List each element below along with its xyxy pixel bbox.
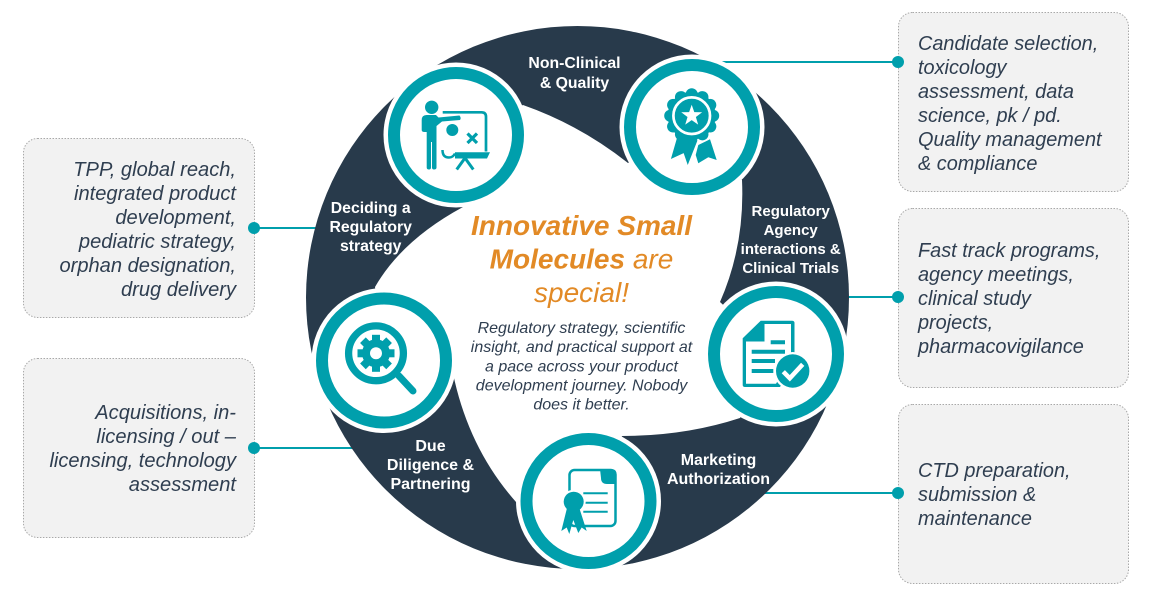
- panel: regulatory agency details: agency meetings,: [918, 264, 1074, 286]
- label: deciding a regulatory strategy: Deciding a: [331, 200, 411, 217]
- panel: marketing authorization details: CTD preparation,: [918, 460, 1071, 482]
- label: deciding a regulatory strategy: Regulatory: [329, 219, 412, 236]
- panel: deciding a regulatory strategy details: orphan designation,: [59, 255, 236, 277]
- title: special!: [534, 277, 629, 308]
- icon: award rosette: [664, 88, 719, 167]
- panel: marketing authorization details: submission &: [918, 484, 1036, 506]
- label: non-clinical and quality: & Quality: [540, 75, 609, 92]
- panel: deciding a regulatory strategy details: development,: [115, 207, 236, 229]
- panel: non-clinical and quality details: science, pk / pd.: [918, 105, 1062, 127]
- panel: non-clinical and quality details: & compliance: [918, 153, 1037, 175]
- title: Innovative Small: [471, 210, 693, 241]
- panel: deciding a regulatory strategy details: TPP, global reach,: [73, 159, 236, 181]
- panel: due diligence details: [24, 358, 254, 538]
- label: marketing authorization: Authorization: [667, 471, 770, 488]
- central description text: a pace across your product: [485, 358, 679, 376]
- central description text: insight, and practical support at: [471, 339, 693, 356]
- panel: marketing authorization details: maintenance: [918, 508, 1032, 530]
- icon: certificate with seal: [561, 469, 616, 534]
- central description text: development journey. Nobody: [476, 378, 688, 394]
- icon: magnifier with gear: [349, 326, 413, 391]
- icon: presenter at board: [422, 101, 490, 170]
- panel: non-clinical and quality details: toxicology: [918, 57, 1008, 79]
- panel: marketing authorization details: [898, 404, 1128, 584]
- step: regulatory agency circle with document check icon: [704, 282, 848, 426]
- panel: regulatory agency details: [898, 208, 1128, 388]
- connector: marketing authorization: [760, 487, 904, 499]
- panel: non-clinical and quality details: [898, 12, 1128, 192]
- label: due diligence and partnering: Due: [415, 438, 446, 455]
- panel: regulatory agency details: clinical study: [918, 288, 1032, 310]
- label: regulatory agency interactions and clinical trials: interactions &: [741, 241, 841, 258]
- central description text: Regulatory strategy, scientific: [478, 320, 685, 337]
- panel: deciding a regulatory strategy details: pediatric strategy,: [78, 231, 236, 253]
- connector: due diligence: [248, 442, 356, 454]
- panel: due diligence details: Acquisitions, in-: [94, 402, 236, 424]
- step: deciding a regulatory strategy circle with presenter icon: [384, 62, 528, 208]
- title: Molecules are: [490, 244, 673, 274]
- connector: non-clinical and quality: [720, 56, 904, 68]
- panel: deciding a regulatory strategy details: integrated product: [74, 183, 237, 205]
- panel: non-clinical and quality details: Quality management: [918, 129, 1103, 151]
- label: non-clinical and quality: Non-Clinical: [528, 55, 621, 72]
- panel: due diligence details: assessment: [129, 474, 237, 496]
- panel: regulatory agency details: projects,: [917, 312, 993, 334]
- label: due diligence and partnering: Diligence &: [387, 457, 475, 474]
- icon: document with check mark: [743, 321, 812, 390]
- panel: non-clinical and quality details: assessment, data: [918, 81, 1074, 103]
- label: regulatory agency interactions and clinical trials: Regulatory: [752, 203, 831, 220]
- label: regulatory agency interactions and clinical trials: Clinical Trials: [742, 260, 839, 277]
- connector: deciding a regulatory strategy: [248, 222, 318, 234]
- panel: deciding a regulatory strategy details: [24, 138, 254, 318]
- label: regulatory agency interactions and clinical trials: Agency: [764, 222, 818, 239]
- step: non-clinical and quality circle with award icon: [620, 54, 764, 200]
- connector: regulatory agency: [845, 291, 904, 303]
- panel: regulatory agency details: Fast track programs,: [918, 240, 1100, 262]
- panel: non-clinical and quality details: Candidate selection,: [918, 33, 1098, 55]
- step: marketing authorization circle with certificate icon: [516, 428, 661, 574]
- step: due diligence circle with gear magnifier icon: [312, 288, 456, 433]
- central description text: does it better.: [533, 396, 630, 414]
- panel: due diligence details: licensing / out –: [96, 426, 237, 448]
- dark circular cycle band: [306, 26, 849, 569]
- label: due diligence and partnering: Partnering: [390, 476, 471, 493]
- panel: deciding a regulatory strategy details: drug delivery: [121, 279, 238, 301]
- label: deciding a regulatory strategy: strategy: [340, 238, 402, 255]
- panel: regulatory agency details: pharmacovigilance: [917, 336, 1084, 358]
- panel: due diligence details: licensing, technology: [49, 450, 238, 472]
- label: marketing authorization: Marketing: [681, 452, 756, 469]
